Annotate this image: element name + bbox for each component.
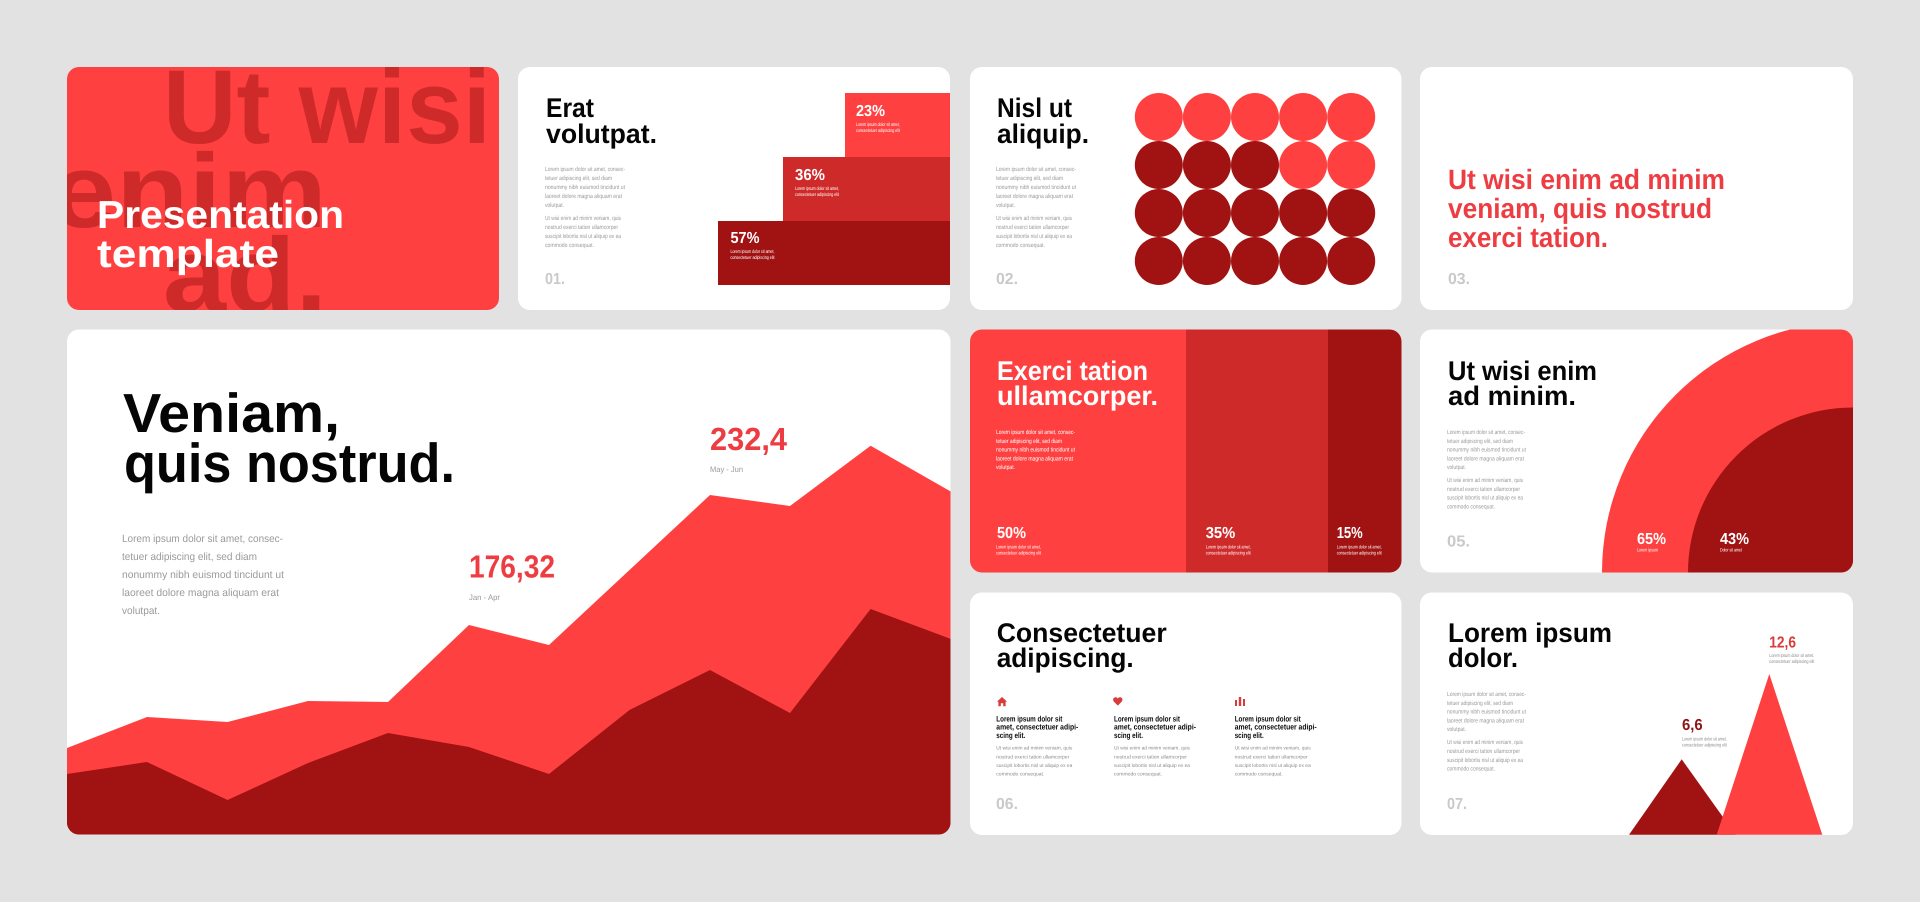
body text: volutpat. — [1447, 464, 1466, 471]
column 15% — [1328, 330, 1402, 572]
column 3: Lorem ipsum dolor sit — [1235, 714, 1301, 724]
body text: laoreet dolore magna aliquam erat — [545, 193, 622, 200]
body text: suscipit lobortis nisl ut aliquip ex ea — [996, 233, 1073, 240]
slide number: 07. — [1447, 796, 1467, 813]
stair step 36% — [783, 157, 950, 221]
body text: commodo consequat. — [1447, 766, 1495, 773]
heading — [123, 392, 452, 494]
stat 35%: 35% — [1206, 525, 1235, 542]
heading — [997, 618, 1167, 673]
column 1: suscipit lobortis nisl ut aliquip ex ea — [996, 763, 1072, 769]
body text: volutpat. — [122, 605, 160, 617]
body text: tetuer adipiscing elit, sed diam — [996, 175, 1063, 182]
heading: volutpat. — [546, 119, 657, 149]
stair step 57%: 57% — [730, 230, 760, 247]
heading: dolor. — [1448, 643, 1518, 673]
data label 12,6: Lorem ipsum dolor sit amet, — [1769, 653, 1814, 659]
body text: tetuer adipiscing elit, sed diam — [1447, 700, 1513, 707]
data label 176,32: Jan - Apr — [469, 593, 500, 602]
body text: volutpat. — [1447, 726, 1466, 733]
body text — [1447, 429, 1526, 510]
body text: Lorem ipsum dolor sit amet, consec- — [1447, 691, 1526, 698]
data label 176,32 — [469, 555, 554, 602]
stat 35%: Lorem ipsum dolor sit amet, — [1206, 544, 1251, 550]
data label 232,4: May - Jun — [710, 465, 743, 474]
stair step 23%: Lorem ipsum dolor sit amet, — [856, 122, 900, 128]
column 50% — [970, 330, 1186, 572]
body text: Ut wisi enim ad minim veniam, quis — [545, 215, 621, 222]
body text: volutpat. — [996, 464, 1015, 471]
column 3: Ut wisi enim ad minim veniam, quis — [1235, 746, 1311, 752]
panel: slide 05 quarter circles — [1420, 330, 1853, 572]
slide number: 01. — [545, 271, 565, 288]
column 1: Lorem ipsum dolor sit — [996, 714, 1063, 724]
data label 176,32: 176,32 — [469, 548, 555, 584]
body text: tetuer adipiscing elit, sed diam — [545, 175, 612, 182]
cover title: template — [97, 233, 279, 276]
heading: ullamcorper. — [997, 381, 1158, 411]
body text: commodo consequat. — [545, 242, 594, 249]
column 2: suscipit lobortis nisl ut aliquip ex ea — [1114, 763, 1190, 769]
body text: Lorem ipsum dolor sit amet, consec- — [545, 166, 625, 173]
body text: nonummy nibh euismod tincidunt ut — [996, 446, 1075, 454]
slide number: 03. — [1448, 271, 1470, 288]
stair step 57% — [718, 221, 950, 285]
stair step 57%: consectetuer adipiscing elit — [730, 255, 775, 261]
background watermark text: enim — [50, 133, 327, 250]
background watermark text: Ut wisi — [163, 49, 491, 166]
heading: Exerci tation — [997, 356, 1148, 386]
statement text: Ut wisi enim ad minim — [1448, 164, 1725, 195]
heading — [1448, 360, 1596, 406]
column 1 — [996, 697, 1079, 778]
column 3 — [1235, 697, 1317, 778]
quarter circle outer — [1602, 330, 1853, 572]
body text — [1447, 691, 1526, 773]
body text: volutpat. — [996, 202, 1015, 209]
stair step 23% — [845, 93, 950, 157]
data label 12,6 — [1769, 634, 1815, 665]
triangle 6,6 — [1629, 759, 1736, 835]
body text: Ut wisi enim ad minim veniam, quis — [1447, 477, 1523, 484]
icon: house — [997, 697, 1007, 706]
column 2: commodo consequat. — [1114, 772, 1162, 778]
panel: slide 04 stacked columns — [970, 330, 1402, 572]
stat 35% — [1206, 525, 1251, 556]
body text: laoreet dolore magna aliquam erat — [122, 587, 279, 599]
background watermark text: ad. — [163, 217, 327, 334]
heading: Ut wisi enim — [1448, 356, 1597, 386]
body text: commodo consequat. — [996, 242, 1045, 249]
stair step 23%: 23% — [856, 103, 885, 120]
heading: quis nostrud. — [124, 432, 455, 494]
stat 15%: Lorem ipsum dolor sit amet, — [1337, 544, 1382, 550]
heading — [546, 93, 657, 149]
quarter circle inner — [1688, 408, 1853, 572]
stat 43% — [1720, 532, 1749, 552]
body text: suscipit lobortis nisl ut aliquip ex ea — [1447, 494, 1524, 502]
body text: Ut wisi enim ad minim veniam, quis — [1447, 739, 1523, 746]
body text: nostrud exerci tation ullamcorper — [545, 224, 618, 231]
stair step 36%: consectetuer adipiscing elit — [795, 192, 839, 198]
icon: bars — [1235, 697, 1245, 706]
body text — [996, 166, 1076, 249]
statement text — [1448, 164, 1725, 253]
body text: nonummy nibh euismod tincidunt ut — [996, 184, 1076, 191]
body text: suscipit lobortis nisl ut aliquip ex ea — [545, 233, 622, 240]
icon: heart — [1113, 697, 1122, 706]
data label 6,6 — [1682, 717, 1727, 748]
column 2: Lorem ipsum dolor sit — [1114, 714, 1180, 724]
circle grid — [1135, 93, 1375, 285]
heading — [997, 93, 1089, 149]
stat 43%: 43% — [1720, 531, 1749, 548]
panel: slide 03 statement — [1420, 67, 1853, 310]
body text: tetuer adipiscing elit, sed diam — [996, 438, 1062, 445]
stat 65% — [1637, 532, 1666, 552]
body text: Lorem ipsum dolor sit amet, consec- — [996, 429, 1075, 436]
column 2: Ut wisi enim ad minim veniam, quis — [1114, 746, 1190, 752]
heading: aliquip. — [997, 119, 1089, 149]
stat 15%: consectetuer adipiscing elit — [1337, 550, 1382, 556]
column 2: amet, consectetuer adipi- — [1114, 723, 1196, 732]
panel: slide 07 triangles — [1420, 592, 1853, 835]
body text: nostrud exerci tation ullamcorper — [1447, 748, 1520, 755]
body text: nostrud exerci tation ullamcorper — [996, 224, 1069, 231]
column 1: nostrud exerci tation ullamcorper — [996, 754, 1070, 760]
data label 232,4 — [710, 428, 787, 474]
body text: nonummy nibh euismod tincidunt ut — [545, 184, 625, 191]
body text: commodo consequat. — [1447, 504, 1495, 510]
panel: slide 02 circle grid — [970, 67, 1402, 310]
column 1: Ut wisi enim ad minim veniam, quis — [996, 746, 1073, 752]
stat 15%: 15% — [1337, 525, 1363, 542]
body text: Ut wisi enim ad minim veniam, quis — [996, 215, 1072, 222]
data label 12,6: consectetuer adipiscing elit — [1769, 659, 1815, 665]
stat 50%: Lorem ipsum dolor sit amet, — [996, 544, 1041, 550]
stat 65%: 65% — [1637, 531, 1666, 548]
body text: laoreet dolore magna aliquam erat — [996, 456, 1073, 462]
panel: slide 01 stair chart — [518, 67, 950, 310]
body text: Lorem ipsum dolor sit amet, consec- — [996, 166, 1076, 173]
body text: laoreet dolore magna aliquam erat — [1447, 717, 1524, 724]
stat 43%: Dolor sit amet — [1720, 548, 1742, 554]
area chart: upper series — [67, 446, 951, 835]
body text: Lorem ipsum dolor sit amet, consec- — [1447, 429, 1525, 436]
body text: suscipit lobortis nisl ut aliquip ex ea — [1447, 757, 1524, 764]
stat 50%: consectetuer adipiscing elit — [996, 550, 1041, 556]
data label 6,6: consectetuer adipiscing elit — [1682, 742, 1727, 748]
heading: ad minim. — [1448, 381, 1576, 411]
area chart: lower series — [67, 609, 951, 835]
column 35% — [1186, 330, 1328, 572]
column 2: nostrud exerci tation ullamcorper — [1114, 754, 1187, 760]
statement text: exerci tation. — [1448, 222, 1608, 253]
body text: tetuer adipiscing elit, sed diam — [122, 551, 257, 563]
body text: tetuer adipiscing elit, sed diam — [1447, 438, 1513, 445]
stair step 57%: Lorem ipsum dolor sit amet, — [730, 249, 774, 255]
column 3: nostrud exerci tation ullamcorper — [1235, 754, 1308, 760]
slide number: 06. — [996, 796, 1018, 813]
stair step 23%: consectetuer adipiscing elit — [856, 128, 900, 134]
data label 232,4: 232,4 — [710, 421, 787, 457]
body text: nostrud exerci tation ullamcorper — [1447, 486, 1520, 493]
column 2: scing elit. — [1114, 731, 1143, 740]
column 1: amet, consectetuer adipi- — [996, 723, 1079, 732]
heading: Veniam, — [123, 382, 340, 444]
body text: volutpat. — [545, 202, 564, 209]
column 3: suscipit lobortis nisl ut aliquip ex ea — [1235, 763, 1311, 769]
stat 65%: Lorem ipsum — [1637, 548, 1658, 554]
statement text: veniam, quis nostrud — [1448, 193, 1712, 224]
background watermark text — [67, 67, 484, 310]
body text: Lorem ipsum dolor sit amet, consec- — [122, 533, 283, 545]
stair step 36%: 36% — [795, 167, 825, 184]
stair step 36%: Lorem ipsum dolor sit amet, — [795, 186, 839, 192]
body text: nonummy nibh euismod tincidunt ut — [1447, 709, 1526, 716]
column 3: scing elit. — [1235, 731, 1264, 740]
panel: area chart slide — [67, 330, 951, 835]
heading: Nisl ut — [997, 93, 1072, 123]
body text: laoreet dolore magna aliquam erat — [1447, 456, 1524, 462]
column 3: commodo consequat. — [1235, 772, 1283, 778]
data label 6,6: Lorem ipsum dolor sit amet, — [1682, 736, 1727, 742]
column 2 — [1113, 697, 1196, 778]
cover title: Presentation — [97, 194, 344, 237]
heading: Lorem ipsum — [1448, 618, 1612, 648]
body text — [996, 429, 1075, 471]
panel: cover — [67, 67, 499, 310]
stat 50%: 50% — [997, 525, 1026, 542]
heading — [1448, 618, 1612, 673]
stat 35%: consectetuer adipiscing elit — [1206, 550, 1251, 556]
column 1: scing elit. — [996, 731, 1025, 740]
column 3: amet, consectetuer adipi- — [1235, 723, 1317, 732]
stat 15% — [1337, 525, 1382, 556]
heading: Erat — [546, 93, 594, 123]
triangle 12,6 — [1717, 674, 1822, 835]
body text: laoreet dolore magna aliquam erat — [996, 193, 1073, 200]
body text: nonummy nibh euismod tincidunt ut — [122, 569, 284, 581]
data label 12,6: 12,6 — [1769, 634, 1796, 651]
heading: Consectetuer — [997, 618, 1167, 648]
body text: nonummy nibh euismod tincidunt ut — [1447, 446, 1526, 454]
body text — [122, 533, 284, 617]
column 1: commodo consequat. — [996, 772, 1044, 778]
slide number: 05. — [1447, 534, 1470, 550]
slide number: 02. — [996, 271, 1018, 288]
cover title — [97, 194, 344, 276]
data label 6,6: 6,6 — [1682, 717, 1703, 734]
heading — [997, 356, 1158, 411]
stat 50% — [996, 525, 1041, 556]
heading: adipiscing. — [997, 643, 1134, 673]
body text — [545, 166, 625, 249]
panel: slide 06 three columns — [970, 592, 1402, 835]
